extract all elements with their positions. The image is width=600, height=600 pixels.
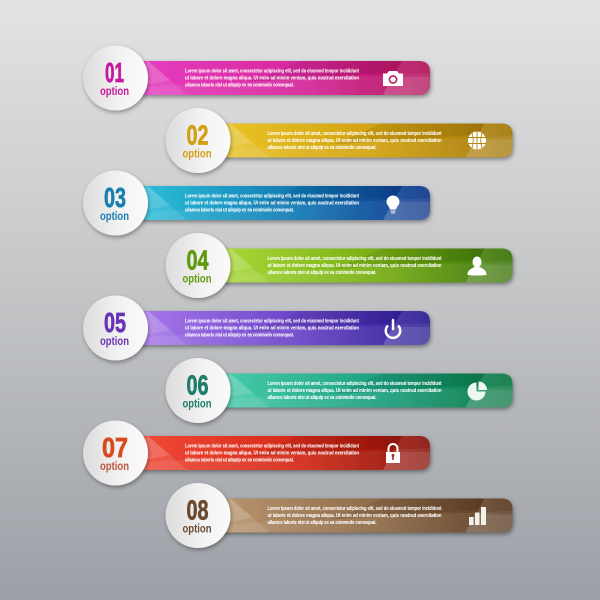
text block 05: Lorem ipsum dolor sit amet, consectetur adipiscing elit, sed do eiusmod tempor incididunt [185,318,359,324]
text block 04: ullamco laboris nisi ut aliquip ex ea commodo consequat. [268,270,377,276]
text block 04: Lorem ipsum dolor sit amet, consectetur adipiscing elit, sed do eiusmod tempor incididunt [268,256,442,262]
bar 01 [140,61,432,95]
bar 02 [222,124,514,158]
text block 06 [268,381,442,401]
text block 07: ullamco laboris nisi ut aliquip ex ea commodo consequat. [185,458,294,464]
icon: pie chart [468,382,487,400]
option 02 row [166,108,514,173]
circle 04: option [182,274,212,286]
icon: power [386,320,400,338]
circle 03 [83,170,148,236]
bar 04 [222,248,514,282]
text block 06: Lorem ipsum dolor sit amet, consectetur adipiscing elit, sed do eiusmod tempor incididunt [268,381,442,387]
text block 05: ullamco laboris nisi ut aliquip ex ea commodo consequat. [185,332,294,338]
text block 06: ut labore et dolore magna aliqua. Ut enim ad minim veniam, quis nostrud exercitation [268,388,442,394]
text block 05: ut labore et dolore magna aliqua. Ut enim ad minim veniam, quis nostrud exercitation [185,326,359,332]
text block 03: Lorem ipsum dolor sit amet, consectetur adipiscing elit, sed do eiusmod tempor incididunt [185,194,359,200]
circle 01: 01 [105,57,124,88]
circle 04: 04 [186,244,209,276]
option 05 row [83,296,432,360]
icon: light bulb [386,196,400,214]
circle 03: option [100,211,129,223]
bar 07 [140,436,432,470]
text block 07: Lorem ipsum dolor sit amet, consectetur adipiscing elit, sed do eiusmod tempor incididunt [185,444,359,450]
text block 03: ullamco laboris nisi ut aliquip ex ea commodo consequat. [185,208,294,214]
icon: person [468,256,486,276]
circle 01: option [100,86,129,98]
text block 01: Lorem ipsum dolor sit amet, consectetur adipiscing elit, sed do eiusmod tempor incididunt [185,68,359,74]
circle 07 [83,420,148,486]
circle 05: 05 [104,307,126,338]
circle 07: option [100,461,129,473]
circle 08: option [182,524,212,536]
text block 02 [268,131,442,151]
option 06 row [166,358,514,423]
text block 08 [268,506,442,526]
option 07 row [83,420,432,486]
circle 06 [166,358,230,423]
circle 06: option [182,398,212,410]
text block 07 [185,444,359,464]
text block 02: Lorem ipsum dolor sit amet, consectetur adipiscing elit, sed do eiusmod tempor incididunt [268,131,442,137]
circle 02 [166,108,230,173]
bar 08 [222,498,514,532]
text block 08: ullamco laboris nisi ut aliquip ex ea commodo consequat. [268,520,377,526]
text block 02: ut labore et dolore magna aliqua. Ut enim ad minim veniam, quis nostrud exercitation [268,138,442,144]
circle 01 [83,46,148,110]
text block 07: ut labore et dolore magna aliqua. Ut enim ad minim veniam, quis nostrud exercitation [185,450,359,456]
option 04 row [166,233,514,298]
option 01 row [83,46,432,110]
circle 02: option [182,148,212,160]
circle 06: 06 [186,370,208,400]
text block 03: ut labore et dolore magna aliqua. Ut enim ad minim veniam, quis nostrud exercitation [185,200,359,206]
option 03 row [83,170,432,236]
bar 05 [140,311,432,345]
circle 04 [166,233,230,298]
text block 03 [185,194,359,214]
text block 01 [185,68,359,88]
text block 04: ut labore et dolore magna aliqua. Ut enim ad minim veniam, quis nostrud exercitation [268,263,442,269]
bar 03 [140,186,432,220]
text block 08: ut labore et dolore magna aliqua. Ut enim ad minim veniam, quis nostrud exercitation [268,513,442,519]
circle 03: 03 [104,182,126,213]
circle 07: 07 [102,432,128,463]
icon: padlock [386,444,400,463]
circle 08 [166,483,230,548]
circle 05 [83,296,148,360]
text block 05 [185,318,359,338]
icon: bar chart [469,507,486,525]
circle 02: 02 [186,120,208,150]
circle 05: option [100,336,129,348]
text block 04 [268,256,442,276]
text block 06: ullamco laboris nisi ut aliquip ex ea commodo consequat. [268,395,377,401]
bar 06 [222,374,514,408]
text block 01: ut labore et dolore magna aliqua. Ut enim ad minim veniam, quis nostrud exercitation [185,76,359,82]
text block 08: Lorem ipsum dolor sit amet, consectetur adipiscing elit, sed do eiusmod tempor incididunt [268,506,442,512]
icon: camera [383,71,403,86]
icon: globe [468,132,486,150]
circle 08: 08 [186,494,208,526]
text block 02: ullamco laboris nisi ut aliquip ex ea commodo consequat. [268,145,377,151]
option 08 row [166,483,514,548]
text block 01: ullamco laboris nisi ut aliquip ex ea commodo consequat. [185,82,294,88]
